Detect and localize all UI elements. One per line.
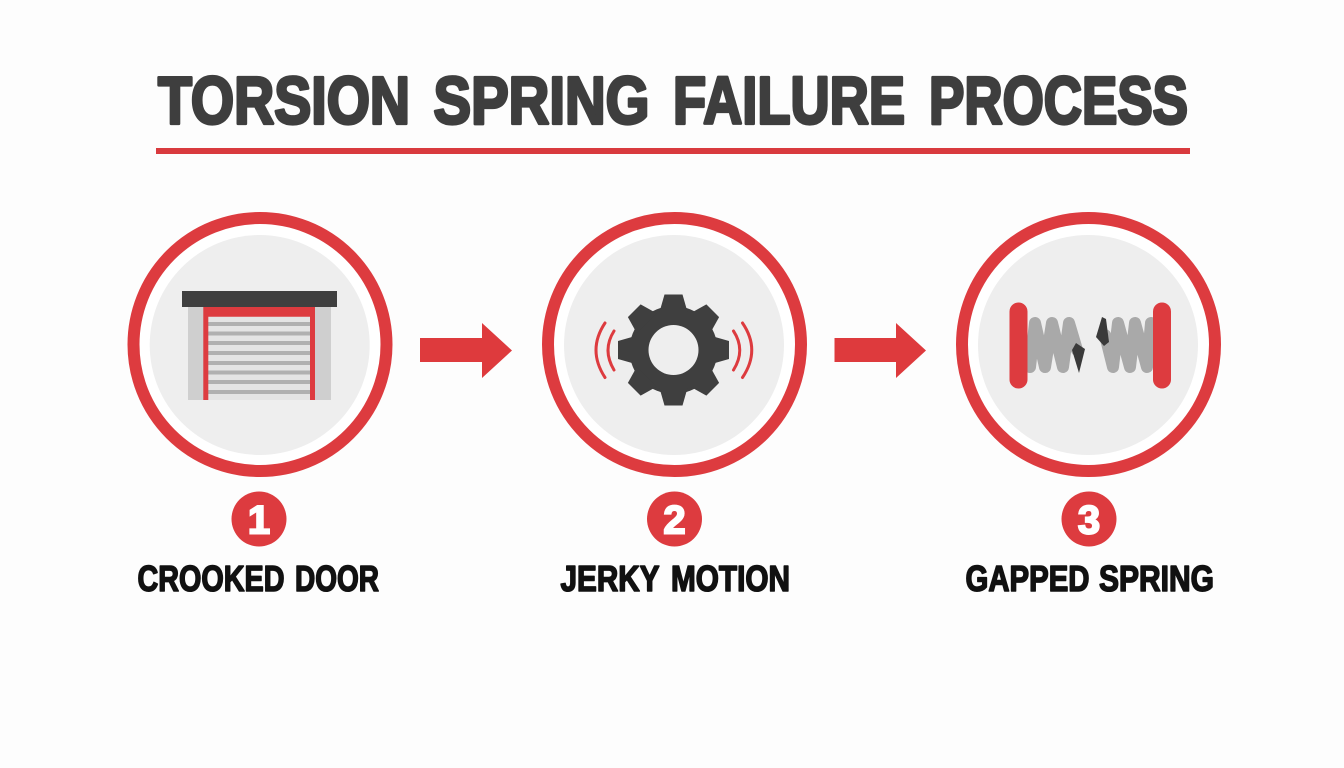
step 1: crooked door — [134, 218, 386, 471]
step 1 inner disc — [150, 235, 370, 455]
step 3 ring — [962, 218, 1215, 471]
icon: broken spring — [1010, 302, 1171, 388]
step 1 ring — [134, 218, 386, 471]
step 3 number badge: 3 — [1078, 498, 1100, 542]
title: SPRING — [434, 64, 650, 138]
title: TORSION — [158, 64, 410, 138]
step 2 label — [560, 558, 790, 599]
icon: garage door — [182, 291, 337, 400]
step 1 label: CROOKED — [138, 558, 284, 599]
step 3: gapped spring — [962, 218, 1215, 471]
step 2 inner disc — [564, 235, 784, 455]
step 3 label: GAPPED — [966, 558, 1090, 599]
step 1 label: DOOR — [295, 558, 379, 599]
step 2: jerky motion — [548, 218, 801, 471]
step 1 number badge: 1 — [248, 498, 270, 542]
step 2 label: MOTION — [671, 558, 790, 599]
step 2 ring — [548, 218, 801, 471]
step 3 label: SPRING — [1099, 558, 1214, 599]
title: PROCESS — [929, 64, 1188, 138]
title: FAILURE — [673, 64, 905, 138]
icon: vibrating gear — [596, 294, 752, 406]
arrow 2 to 3 — [834, 323, 926, 378]
step 2 number badge: 2 — [663, 498, 686, 542]
step 1 number badge — [232, 492, 286, 546]
step 2 label: JERKY — [560, 558, 660, 599]
step 2 number badge — [647, 492, 702, 546]
title underline — [156, 148, 1190, 154]
title — [158, 64, 1188, 138]
step 3 number badge — [1062, 492, 1116, 546]
step 3 inner disc — [978, 235, 1198, 455]
step 3 label — [966, 558, 1214, 599]
arrow 1 to 2 — [420, 323, 512, 378]
